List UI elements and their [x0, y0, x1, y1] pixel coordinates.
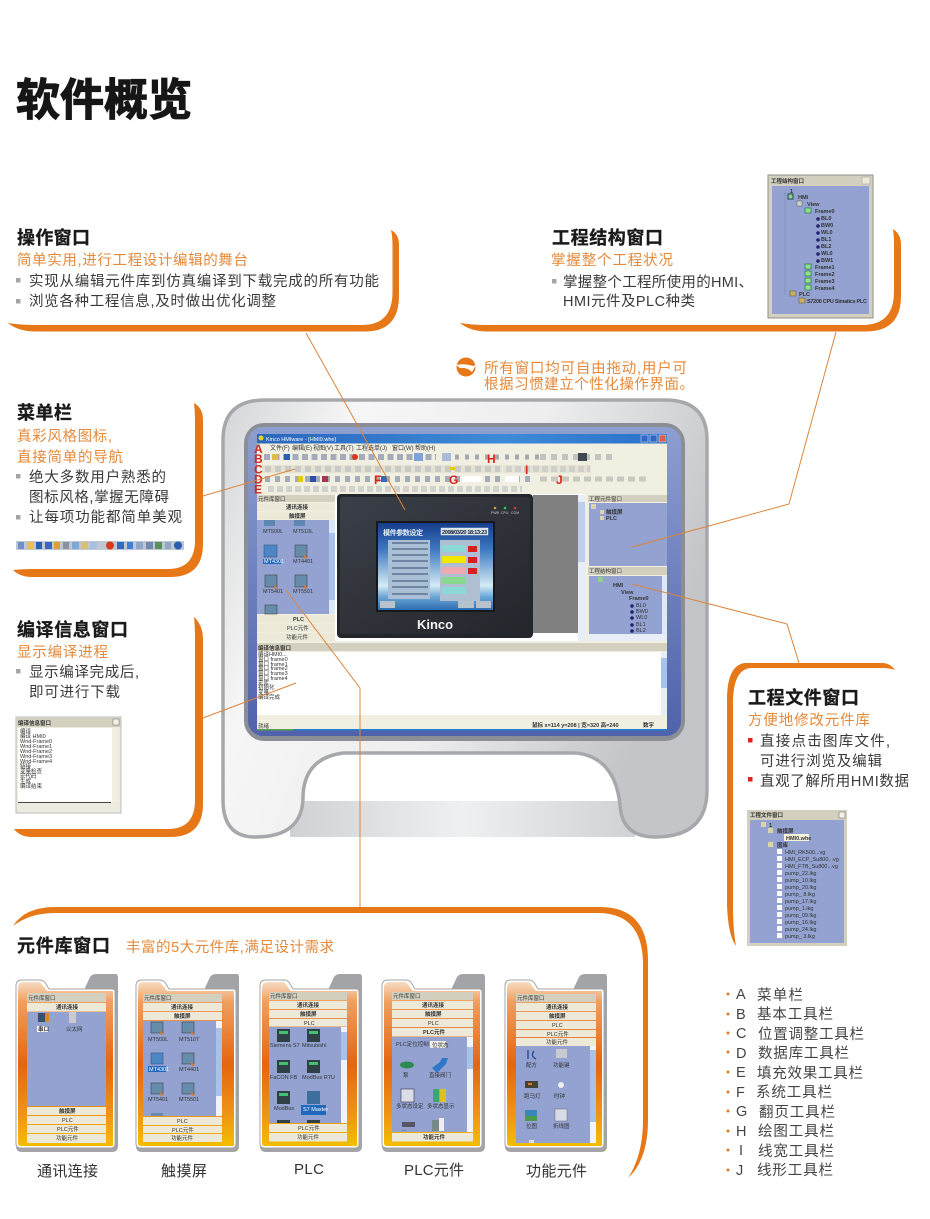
left library panel: MT4301 — [264, 559, 284, 565]
screenshot: project files: HMI_ECP_Su800...vg — [785, 857, 839, 863]
folder: touch screen: PLC元件 — [172, 1126, 194, 1134]
bullet text: 直观了解所用HMI数据 — [760, 773, 909, 790]
right panels: View — [621, 590, 634, 596]
menu bar: 窗口(W) — [392, 444, 414, 452]
device screen — [376, 521, 495, 612]
folder: PLC components: 直接阀门 — [429, 1071, 451, 1079]
folder: touch screen — [136, 974, 239, 1152]
monitor body — [223, 400, 707, 837]
folder: touch screen: MT5501 — [179, 1097, 199, 1103]
panel bracket — [14, 617, 203, 837]
menu bar: 文件(F) — [270, 444, 290, 452]
bullet text: 绝大多数用户熟悉的 — [29, 469, 166, 486]
subheading: 丰富的5大元件库,满足设计需求 — [126, 938, 334, 956]
bullet text: 显示编译完成后, — [29, 664, 139, 681]
screenshot: structure tree: BW0 — [821, 223, 833, 229]
screenshot: compile info: 编译 — [20, 727, 32, 735]
screenshot: project files: pump_1.lkg — [785, 906, 813, 912]
heading: 菜单栏 — [17, 403, 72, 423]
left library panel: PLC — [293, 617, 304, 623]
legend: toolbars A-J: 系统工具栏 — [756, 1084, 832, 1101]
screenshot: project files: pump_24.lkg — [785, 927, 816, 933]
screenshot: project files: HMI_RK500...vg — [785, 850, 825, 856]
folder: PLC components: PLC元件 — [423, 1028, 446, 1036]
folder: PLC components: 元件库窗口 — [393, 992, 421, 1000]
subheading: 简单实用,进行工程设计编辑的舞台 — [17, 252, 248, 269]
right panels: BL1 — [636, 622, 646, 628]
subheading: 显示编译进程 — [17, 644, 108, 661]
panel: menu bar — [13, 403, 203, 577]
screenshot: structure tree: 1 — [790, 189, 793, 195]
bullet text — [16, 469, 182, 526]
subheading: 真彩风格图标, — [17, 427, 112, 445]
status bar: 数字 — [643, 721, 655, 729]
folder: communication: 以太网 — [66, 1025, 83, 1033]
screenshot: structure tree: PLC — [799, 292, 810, 298]
legend: toolbars A-J: E — [736, 1065, 746, 1081]
legend: toolbars A-J: 线宽工具栏 — [758, 1143, 834, 1160]
screenshot: structure tree: HMI — [798, 195, 809, 201]
folder: function components: PLC — [552, 1023, 563, 1029]
left library panel: MT4401 — [293, 559, 313, 565]
folder: function components: 时钟 — [554, 1092, 566, 1100]
screenshot: project files: pump_10.lkg — [785, 878, 816, 884]
toolbar letters: H — [487, 452, 496, 466]
legend: toolbars A-J: G — [736, 1104, 747, 1120]
device screen: 2008/03/20 18:13:23 — [442, 530, 487, 536]
right panels: HMI — [613, 583, 624, 589]
panel bracket — [13, 403, 203, 577]
menu bar: 工程选单(J) — [356, 444, 387, 452]
folder: PLC: PLC — [304, 1021, 315, 1027]
folder: PLC components: 泵 — [403, 1072, 409, 1079]
compile output panel: 窗口 frame0 — [258, 655, 288, 663]
leader lines — [203, 332, 836, 907]
screenshot: structure tree: BL1 — [821, 237, 831, 243]
screenshot: compile info — [16, 717, 121, 813]
folder: touch screen: MT5401 — [148, 1097, 168, 1103]
folder: function components: 功能元件 — [546, 1038, 569, 1046]
compile output panel: 窗口 frame2 — [258, 664, 288, 672]
right panels: BL2 — [636, 628, 646, 634]
folder: communication: 触摸屏 — [59, 1107, 76, 1115]
right panels: 触摸屏 — [606, 508, 623, 516]
label: 触摸屏 — [161, 1163, 207, 1180]
folder: PLC: 元件库窗口 — [270, 992, 298, 1000]
screenshot: structure tree: Frame2 — [815, 272, 835, 278]
folder: PLC components — [382, 974, 485, 1152]
screenshot: structure tree — [768, 175, 873, 318]
legend: toolbars A-J: 菜单栏 — [757, 987, 803, 1004]
compile output panel: 编译信息窗口 — [258, 644, 291, 652]
right panels — [588, 495, 667, 641]
compile output panel: 宏库 — [258, 679, 270, 687]
legend: toolbars A-J: A — [736, 987, 746, 1003]
HMI device — [337, 494, 533, 638]
left library panel: MT5501 — [293, 589, 313, 595]
folder: PLC components: 多状态显示 — [427, 1102, 455, 1110]
folder: PLC: ModBus — [274, 1106, 294, 1112]
Kinco logo: Kinco — [417, 617, 453, 632]
folder: communication — [16, 974, 118, 1152]
screenshot: compile info: 生成 — [20, 777, 32, 785]
legend: toolbars A-J: 位置调整工具栏 — [758, 1026, 864, 1043]
folder: PLC: ModBus RTU — [302, 1075, 335, 1081]
screenshot: compile info: Wnd-Frame4 — [20, 759, 52, 765]
toolbar letters: A — [254, 442, 263, 456]
legend: toolbars A-J: 数据库工具栏 — [758, 1045, 849, 1062]
legend: toolbars A-J: C — [736, 1026, 746, 1042]
screenshot: compile info: Wnd-Frame1 — [20, 744, 52, 750]
screenshot: structure tree: BL0 — [821, 216, 831, 222]
bullet text — [552, 274, 753, 310]
icon strip — [16, 541, 184, 550]
toolbar letters — [254, 442, 563, 496]
compile output panel: 编译HMI0... — [258, 650, 287, 658]
toolbar letters: I — [525, 463, 528, 477]
panel bracket — [460, 229, 901, 332]
folder: communication: PLC — [62, 1118, 73, 1124]
device LEDs — [491, 507, 519, 515]
folder: function components: 通讯连接 — [546, 1003, 569, 1011]
status bar: 鼠标 x=114 y=208 | 宽=320 高=240 — [532, 721, 619, 729]
screenshot: project files: 工程文件窗口 — [750, 811, 783, 819]
screenshot: compile info: 宏代码 — [20, 772, 37, 780]
menu bar: 视图(V) — [313, 444, 333, 452]
folder: PLC: FaCON FB — [270, 1075, 298, 1081]
screenshot: project files: pump_ 3.lkg — [785, 934, 815, 940]
panel: project file window — [727, 663, 909, 946]
screenshot: structure tree: WL0 — [821, 251, 833, 257]
screenshot: structure tree: 工程结构窗口 — [771, 177, 804, 185]
right panels: Frame0 — [629, 596, 649, 602]
screenshot: structure tree: Frame3 — [815, 279, 835, 285]
device LEDs: COM — [511, 511, 519, 515]
folder: PLC: S7 Master — [303, 1107, 328, 1113]
folder: touch screen: MT510T — [179, 1037, 200, 1043]
screenshot: project files: HMI0.whe — [786, 836, 811, 842]
heading: 工程文件窗口 — [748, 687, 859, 708]
right panels: 工程结构窗口 — [589, 567, 622, 575]
folder: touch screen: 通讯连接 — [171, 1003, 194, 1011]
heading: 编译信息窗口 — [17, 619, 128, 640]
monitor frame — [223, 400, 707, 837]
compile output panel: 变量 — [258, 688, 270, 696]
toolbar letters: F — [374, 473, 381, 487]
folder: PLC: 触摸屏 — [300, 1010, 317, 1018]
panel: compile info window — [14, 617, 203, 837]
panel: library window — [13, 907, 648, 1180]
subheading: 掌握整个工程状况 — [551, 252, 674, 269]
screenshot: structure tree: View — [807, 202, 820, 208]
screenshot: project files: pump_09.lkg — [785, 913, 816, 919]
folder: touch screen: PLC — [177, 1119, 188, 1125]
screenshot: compile info: Wnd-Frame0 — [20, 739, 52, 745]
bullet text: 掌握整个工程所使用的HMI、 — [563, 274, 753, 291]
folder: PLC components: 触摸屏 — [425, 1010, 442, 1018]
folder: function components — [505, 974, 607, 1152]
stand shadow — [290, 801, 635, 837]
screenshot: project files: 1 — [769, 823, 772, 829]
folder: PLC: Mitsubishi — [302, 1043, 326, 1049]
legend: toolbars A-J: 填充效果工具栏 — [757, 1065, 863, 1082]
folder: communication: 串口 — [38, 1025, 49, 1033]
screenshot: structure tree: Frame0 — [815, 209, 835, 215]
screenshot: project files: pump_16.lkg — [785, 920, 816, 926]
status bar: 就绪 — [258, 722, 270, 730]
panel bracket — [727, 663, 895, 946]
screenshot: structure tree: WL0 — [821, 230, 833, 236]
toolbar letters: B — [254, 452, 263, 466]
folder: PLC components: PLC定位控制 — [396, 1040, 429, 1048]
toolbar letters: D — [254, 472, 263, 486]
software window screenshot — [254, 434, 667, 730]
bullet text: 直接点击图库文件, — [760, 733, 890, 750]
callout: draggable windows note — [456, 358, 687, 377]
compile output panel: 窗口 frame3 — [258, 669, 288, 677]
left library panel: 元件库窗口 — [258, 495, 286, 503]
device LEDs: CPU — [501, 511, 509, 515]
folder: touch screen: MT4401 — [179, 1067, 199, 1073]
legend: toolbars A-J: H — [736, 1124, 746, 1140]
panel: menu bar: 直接简单的导航 — [17, 449, 124, 466]
screenshot: compile info: 编译结束 — [20, 782, 43, 790]
screenshot: compile info: Wnd-Frame3 — [20, 754, 52, 760]
compile output panel: 窗口 frame1 — [258, 660, 288, 668]
device LEDs: PWR — [491, 511, 500, 515]
heading: 工程结构窗口 — [552, 227, 663, 248]
folder: PLC — [260, 974, 362, 1152]
legend: toolbars A-J: B — [736, 1007, 746, 1023]
menu bar: 帮助(H) — [415, 444, 435, 452]
bullet text: 让每项功能都简单美观 — [29, 509, 182, 526]
panel bracket — [13, 907, 648, 1178]
heading: 元件库窗口 — [17, 935, 110, 956]
bullet text: 图标风格,掌握无障碍 — [29, 488, 169, 506]
folder: function components: 折线图 — [553, 1122, 570, 1130]
compile output panel: 初始化 — [258, 683, 275, 691]
right panels: BW0 — [636, 609, 648, 615]
screenshot: compile info: 编译信息窗口 — [18, 719, 51, 727]
folder: function components: 位图 — [526, 1122, 538, 1130]
panel bracket — [8, 230, 399, 332]
folder: PLC components: 多状态设定 — [396, 1102, 424, 1110]
folder: function components: 跑马灯 — [524, 1092, 541, 1100]
toolbar letters: E — [254, 482, 262, 496]
folder: PLC components: 通讯连接 — [422, 1001, 445, 1009]
note text second line: 根据习惯建立个性化操作界面。 — [484, 376, 694, 393]
right panels: WL0 — [636, 615, 647, 621]
left library panel — [257, 495, 335, 641]
folder: function components: 触摸屏 — [549, 1012, 566, 1020]
folder: touch screen: MT500L — [148, 1037, 168, 1043]
legend: toolbars A-J: 绘图工具栏 — [758, 1123, 834, 1140]
menu bar: 工具(T) — [334, 445, 354, 452]
label: PLC — [294, 1161, 324, 1178]
right panels: 工程元件窗口 — [589, 495, 622, 503]
bullet text — [748, 733, 909, 790]
folder: PLC components: PLC — [428, 1021, 439, 1027]
folder: PLC components: 位状态 — [432, 1041, 449, 1049]
heading: 操作窗口 — [17, 227, 90, 248]
folder: communication: 功能元件 — [56, 1134, 79, 1142]
title bar — [257, 434, 667, 444]
screenshot: compile info: Wnd-Frame2 — [20, 749, 52, 755]
bullet text: 即可进行下载 — [29, 684, 120, 701]
panel: operation window — [8, 227, 399, 332]
left library panel: 功能元件 — [286, 633, 309, 641]
toolbar letters: J — [556, 473, 563, 487]
compile output panel: 编译完成 — [258, 693, 281, 701]
label: 功能元件 — [526, 1163, 587, 1180]
screenshot: project files: HMI_FTB_Su800...vg — [785, 864, 838, 870]
device screen: 模件参数设定 — [383, 528, 423, 537]
screenshot: structure tree: S7200 CPU Simatics PLC — [807, 299, 867, 305]
bullet text: HMI元件及PLC种类 — [563, 293, 695, 310]
canvas area — [335, 494, 585, 641]
screenshot: project files — [747, 810, 847, 946]
screenshot: structure tree: Frame1 — [815, 265, 835, 271]
panel: project structure window — [460, 175, 901, 332]
menu bar — [270, 444, 435, 452]
folder: communication: PLC元件 — [57, 1125, 79, 1133]
folder: PLC: 功能元件 — [297, 1133, 320, 1141]
compile output panel: 窗口 frame4 — [258, 674, 288, 682]
folder: function components: 功能键 — [553, 1061, 570, 1069]
folder: communication: 通讯连接 — [56, 1003, 79, 1011]
icon: orange arrow — [456, 358, 476, 376]
label: 通讯连接 — [37, 1163, 98, 1180]
folder: touch screen: 触摸屏 — [174, 1012, 191, 1020]
screenshot: compile info: 编译 HMI0 — [20, 732, 46, 740]
screenshot: project files: pump_17.lkg — [785, 899, 816, 905]
legend: toolbars A-J: I — [739, 1143, 743, 1159]
screenshot: project files: pump_22.lkg — [785, 871, 816, 877]
folder: touch screen: MT4301 — [149, 1067, 169, 1073]
menu bar: 编辑(E) — [292, 444, 312, 452]
legend: toolbars A-J: 基本工具栏 — [757, 1006, 833, 1023]
window base — [257, 434, 667, 730]
bullet text: 可进行浏览及编辑 — [760, 753, 882, 770]
folder: function components: 元件库窗口 — [517, 994, 545, 1002]
left library panel: MT510L — [293, 529, 313, 535]
bullet text: 浏览各种工程信息,及时做出优化调整 — [29, 293, 276, 310]
legend: toolbars A-J — [726, 987, 864, 1179]
legend: toolbars A-J: 翻页工具栏 — [759, 1104, 835, 1121]
left library panel: MT5401 — [263, 589, 283, 595]
toolbar letters: C — [254, 462, 263, 476]
folder: PLC: 通讯连接 — [297, 1001, 320, 1009]
legend: toolbars A-J: F — [736, 1085, 745, 1101]
folder: PLC: PLC元件 — [298, 1124, 320, 1132]
toolbar letters: G — [449, 473, 458, 487]
folder: communication: 元件库窗口 — [28, 994, 56, 1002]
screenshot: project files: pump_ 8.lkg — [785, 892, 815, 898]
folder: touch screen: 功能元件 — [171, 1134, 194, 1142]
screenshot: compile info: 变量检查 — [20, 767, 43, 775]
bullet text — [16, 664, 139, 701]
left library panel: 触摸屏 — [289, 512, 306, 520]
screenshot: compile info: 链接 — [20, 762, 32, 770]
compile output panel — [257, 643, 667, 715]
screen bezel — [244, 423, 685, 741]
subheading: 方便地修改元件库 — [748, 712, 870, 729]
left library panel: PLC元件 — [287, 624, 309, 632]
folder: function components: PLC元件 — [547, 1030, 569, 1038]
folder: touch screen: 元件库窗口 — [144, 994, 172, 1002]
left library panel: 通讯连接 — [286, 503, 309, 511]
screenshot: structure tree: BW1 — [821, 258, 833, 264]
legend: toolbars A-J: 线形工具栏 — [757, 1162, 833, 1179]
title: 软件概览 — [16, 76, 192, 125]
folder: PLC components: 功能元件 — [423, 1133, 446, 1141]
bullet text — [16, 272, 379, 310]
screenshot: project files: 图库 — [777, 841, 789, 849]
folder: PLC: Siemens S7 — [270, 1043, 300, 1049]
legend: toolbars A-J: D — [736, 1046, 746, 1062]
screenshot: project files: 触摸屏 — [777, 827, 794, 835]
title bar: Kinco HMIware - [HMI0.whe] — [266, 437, 336, 443]
folder: PLC components: ... — [402, 1127, 407, 1133]
label: PLC元件 — [404, 1162, 464, 1179]
note text: 所有窗口均可自由拖动,用户可 — [484, 359, 687, 377]
left library panel: MT500L — [263, 529, 283, 535]
toolbars — [262, 453, 650, 489]
screenshot: structure tree: BL2 — [821, 244, 831, 250]
bullet text: 实现从编辑元件库到仿真编译到下载完成的所有功能 — [29, 272, 379, 290]
legend: toolbars A-J: J — [736, 1163, 743, 1179]
screenshot: structure tree: Frame4 — [815, 286, 836, 292]
right panels: PLC — [606, 516, 617, 522]
screenshot: project files: pump_20.lkg — [785, 885, 816, 891]
right panels: BL0 — [636, 603, 646, 609]
status bar — [257, 721, 667, 730]
folder: function components: 配方 — [526, 1061, 538, 1069]
